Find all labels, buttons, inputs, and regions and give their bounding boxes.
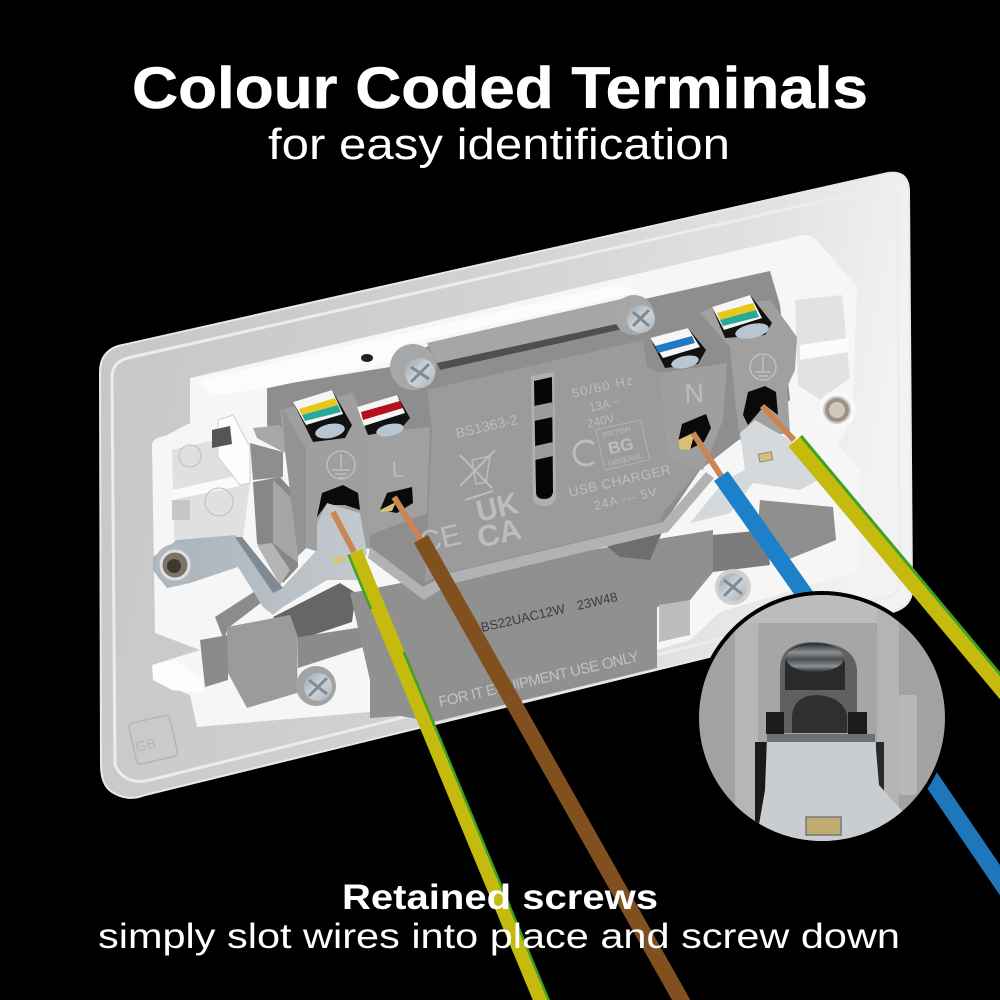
lens ring — [695, 591, 949, 845]
left side flange — [253, 425, 300, 457]
lens background — [699, 595, 945, 841]
wires — [333, 406, 1000, 1000]
neutral blue wire — [693, 433, 1000, 895]
moulded markings: CE — [416, 518, 464, 560]
brass slot — [806, 817, 841, 835]
left frame circle marks — [179, 445, 233, 516]
moulded markings: BRITISH — [601, 424, 632, 440]
left dark block — [766, 712, 784, 734]
right column — [877, 600, 899, 830]
caption heading: Retained screws — [342, 878, 658, 917]
lower right block — [757, 500, 836, 560]
right eyelet — [818, 391, 856, 429]
lower left wedge — [215, 590, 262, 640]
left column — [735, 612, 759, 824]
lower lip — [368, 472, 714, 600]
dark cavity — [273, 583, 356, 640]
lower left block — [227, 615, 298, 708]
lower left side — [200, 635, 228, 687]
neutral terminal: N — [684, 378, 705, 409]
top right screw — [614, 295, 655, 335]
lower left screw — [296, 666, 336, 706]
right earth bracket — [690, 420, 822, 523]
approval mark: GB — [134, 735, 157, 755]
faceplate — [100, 173, 912, 798]
left side floor — [257, 543, 290, 585]
lower housing markings — [479, 589, 619, 635]
lower housing markings: BS22UAC12W — [479, 601, 567, 635]
upper housing band — [267, 271, 790, 592]
moulded markings: UK — [473, 487, 522, 529]
lower notch — [659, 600, 690, 642]
moulded markings: CA — [474, 513, 524, 555]
moulded markings — [416, 372, 672, 560]
left frame bar — [172, 475, 240, 500]
moulded markings: 13A ~ — [588, 394, 621, 415]
right earth wire — [762, 406, 1000, 698]
moulded markings: GENERAL — [607, 451, 644, 468]
moulded markings: USB CHARGER — [567, 462, 672, 500]
moulded markings: 50/60 Hz — [570, 372, 634, 401]
live terminal: L — [391, 456, 404, 482]
left side wall — [250, 443, 283, 480]
plate inner rim — [112, 188, 900, 781]
title: Colour Coded Terminals — [132, 56, 868, 121]
lower recess — [603, 530, 663, 560]
left earth wire — [333, 512, 550, 1000]
right frame bar — [800, 338, 849, 360]
right frame interior — [795, 295, 850, 400]
approval mark — [128, 715, 178, 765]
dark opening — [780, 642, 857, 733]
dark arch — [792, 695, 847, 733]
left side block — [273, 480, 298, 563]
left upper clip — [218, 415, 250, 485]
white top band — [200, 284, 640, 396]
screw thread — [785, 643, 845, 690]
moulded markings: 24A --- 5V — [593, 485, 659, 513]
magnified screw detail — [690, 590, 950, 850]
top band — [744, 595, 898, 623]
moulded markings: BG — [606, 434, 635, 458]
equipment label: FOR IT EQUIPMENT USE ONLY — [437, 648, 641, 711]
USB vent slot — [531, 372, 556, 506]
live brown wire — [394, 497, 684, 1000]
lower housing markings: 23W48 — [575, 589, 619, 613]
socket back assembly — [100, 173, 912, 798]
metal tab — [759, 738, 902, 841]
top left screw — [390, 344, 436, 390]
moulded markings: BS1363-2 — [454, 411, 519, 441]
right earth terminal — [700, 295, 797, 440]
strap — [427, 297, 640, 363]
caption text: simply slot wires into place and screw down — [98, 917, 900, 956]
left side recess — [253, 477, 298, 583]
left frame square — [172, 500, 190, 520]
lower centre housing — [350, 530, 713, 722]
lower right screw — [715, 569, 751, 605]
side shadow — [755, 742, 767, 832]
strap shadow — [437, 320, 636, 370]
small hole — [361, 354, 373, 362]
neutral terminal — [650, 328, 727, 470]
left frame interior — [172, 440, 250, 575]
moulded markings: 240V — [586, 411, 616, 431]
live terminal — [357, 395, 430, 535]
inner white frame — [152, 235, 860, 727]
lower left clip — [153, 660, 203, 693]
right neck — [713, 530, 770, 572]
left earth bracket — [153, 503, 367, 615]
top recess — [758, 626, 759, 742]
lower channel — [298, 627, 363, 668]
left gap — [212, 426, 232, 448]
centre label panel — [425, 340, 700, 582]
left earth terminal — [280, 390, 370, 560]
right dark block — [848, 712, 867, 734]
subtitle: for easy identification — [268, 120, 730, 169]
right block — [899, 695, 917, 795]
